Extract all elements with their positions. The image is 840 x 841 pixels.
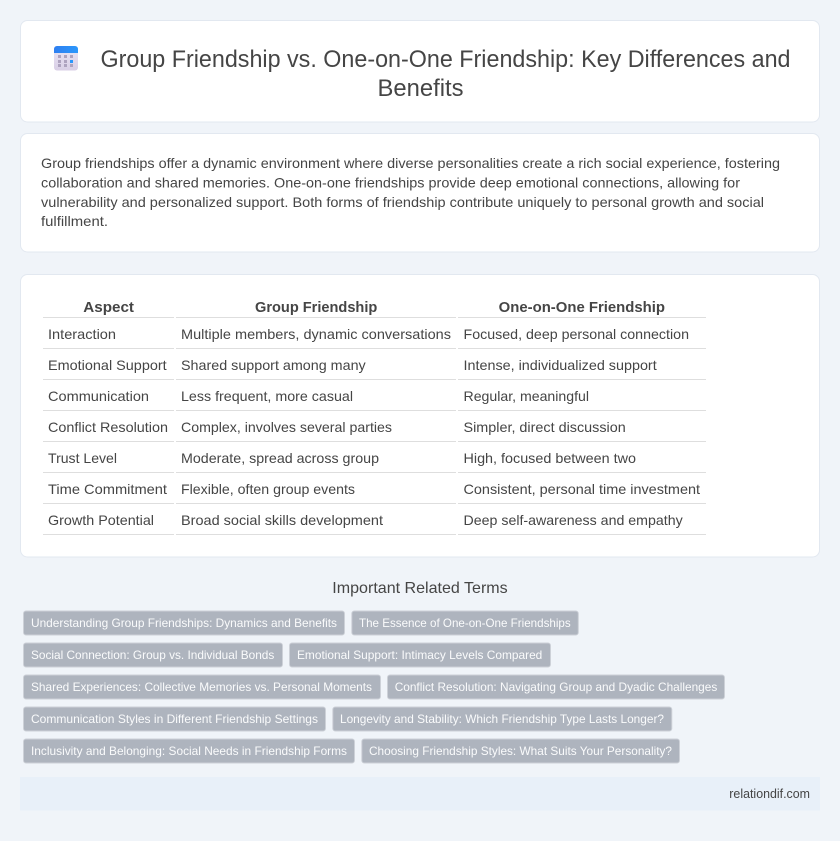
row: Conflict Resolution <box>48 419 626 435</box>
row: Growth Potential: Deep self-awareness and empathy <box>464 512 683 528</box>
text block: introduction paragraph <box>41 155 780 229</box>
row: Time Commitment <box>48 481 700 497</box>
panel: introduction <box>20 134 820 252</box>
icon: calendar <box>54 46 78 70</box>
tag <box>362 739 680 763</box>
tag: Shared Experiences: Collective Memories vs. Personal Moments <box>31 680 372 694</box>
row: Growth Potential <box>48 512 683 528</box>
tag: Inclusivity and Belonging: Social Needs in Friendship Forms <box>31 744 347 758</box>
tag <box>24 707 326 731</box>
heading: related terms: Important Related Terms <box>332 580 508 597</box>
table header <box>83 300 665 316</box>
tag <box>388 675 724 699</box>
row: Emotional Support <box>48 357 657 373</box>
tag <box>352 611 578 635</box>
row: Communication <box>48 388 589 404</box>
tag: Understanding Group Friendships: Dynamics and Benefits <box>31 616 337 630</box>
title <box>100 46 790 102</box>
row: Interaction <box>48 326 689 342</box>
tag: Communication Styles in Different Friendship Settings <box>31 712 318 726</box>
row: Emotional Support: Emotional Support <box>48 357 167 373</box>
row: Emotional Support: Intense, individualized support <box>464 357 657 373</box>
panel: header card <box>20 20 820 122</box>
row: Trust Level: High, focused between two <box>464 450 636 466</box>
text block: introduction paragraph: collaboration and shared memories. One-on-one friendships provide deep emotional connections, allowing for <box>41 174 740 190</box>
row: Communication: Less frequent, more casual <box>181 388 353 404</box>
tag: Choosing Friendship Styles: What Suits Your Personality? <box>369 744 672 758</box>
row: Conflict Resolution: Complex, involves several parties <box>181 419 392 435</box>
row: Time Commitment: Consistent, personal time investment <box>464 481 700 497</box>
row: Growth Potential: Broad social skills development <box>181 512 383 528</box>
row: Trust Level: Moderate, spread across group <box>181 450 379 466</box>
row: Time Commitment: Flexible, often group events <box>181 481 355 497</box>
footer <box>20 777 820 810</box>
row: Time Commitment: Time Commitment <box>48 481 167 497</box>
table header: Group Friendship <box>255 300 377 316</box>
tag <box>24 739 354 763</box>
panel: related terms tags <box>24 611 724 763</box>
row: Interaction: Focused, deep personal connection <box>464 326 689 342</box>
row: Interaction: Multiple members, dynamic conversations <box>181 326 451 342</box>
tag <box>333 707 672 731</box>
row: Growth Potential: Growth Potential <box>48 512 154 528</box>
text block: introduction paragraph: fulfillment. <box>41 213 108 229</box>
tag: Longevity and Stability: Which Friendship Type Lasts Longer? <box>340 712 664 726</box>
tag <box>290 643 550 667</box>
table header: Aspect <box>83 300 134 316</box>
row: Emotional Support: Shared support among many <box>181 357 366 373</box>
tag: The Essence of One-on-One Friendships <box>359 616 571 630</box>
text block: introduction paragraph: Group friendships offer a dynamic environment where diverse personalities create a rich social experience, fostering <box>41 155 780 171</box>
tag: Emotional Support: Intimacy Levels Compared <box>297 648 542 662</box>
text block: introduction paragraph: vulnerability and personalized support. Both forms of friendship contribute uniquely to personal growth and social <box>41 194 764 210</box>
tag <box>24 611 344 635</box>
row: Trust Level <box>48 450 636 466</box>
row: Conflict Resolution: Conflict Resolution <box>48 419 168 435</box>
tag <box>24 675 380 699</box>
tag: Conflict Resolution: Navigating Group and Dyadic Challenges <box>395 680 717 694</box>
footer: relationdif.com <box>729 787 810 801</box>
tag: Social Connection: Group vs. Individual Bonds <box>31 648 274 662</box>
row: Communication: Regular, meaningful <box>464 388 589 404</box>
title: Benefits <box>378 75 464 102</box>
panel: comparison table <box>20 274 820 557</box>
row: Trust Level: Trust Level <box>48 450 117 466</box>
row: Conflict Resolution: Simpler, direct discussion <box>464 419 626 435</box>
row: Communication: Communication <box>48 388 149 404</box>
row: Interaction: Interaction <box>48 326 116 342</box>
tag <box>24 643 282 667</box>
title: Group Friendship vs. One-on-One Friendship: Key Differences and <box>100 46 790 73</box>
table header: One-on-One Friendship <box>499 300 665 316</box>
